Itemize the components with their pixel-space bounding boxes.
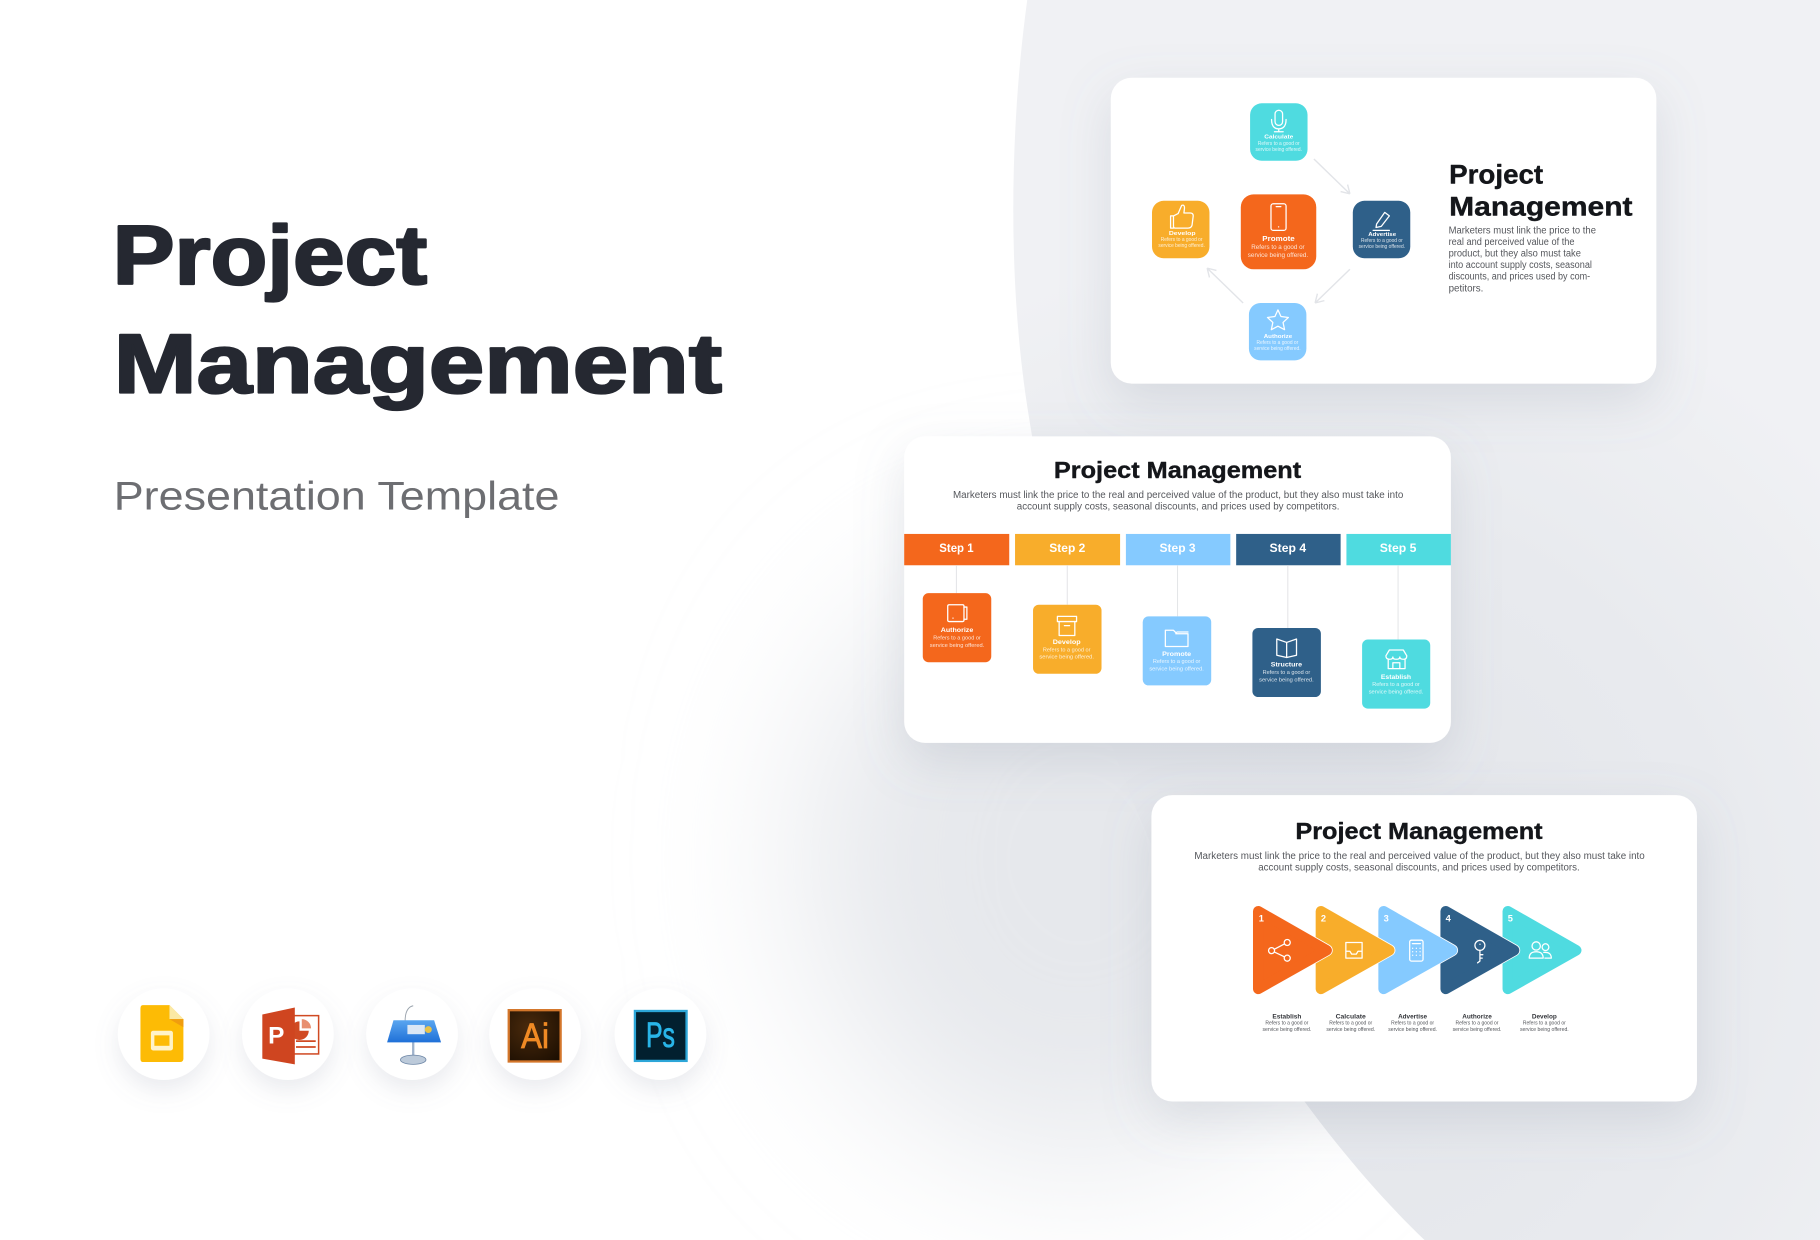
label: Establish xyxy=(1263,1013,1312,1033)
box: Advertise xyxy=(1353,201,1410,258)
step 3: Step 3 xyxy=(1160,541,1196,555)
main title xyxy=(113,208,722,411)
box: Calculate: Refers to a good or xyxy=(1258,141,1300,147)
box: Promote: service being offered. xyxy=(1248,252,1308,259)
label: Establish: service being offered. xyxy=(1263,1027,1312,1033)
step 1: Step 1 xyxy=(939,541,974,555)
box: Develop xyxy=(1152,201,1209,258)
icon: Keynote xyxy=(366,988,458,1080)
icon: Google Slides xyxy=(118,988,210,1080)
step 5: Establish xyxy=(1381,674,1411,681)
step 1 xyxy=(904,534,1009,662)
label: Advertise xyxy=(1388,1013,1437,1033)
label: Authorize: Refers to a good or xyxy=(1456,1021,1499,1027)
triangle 2: 2 xyxy=(1321,914,1326,924)
box: Advertise: Refers to a good or xyxy=(1361,238,1403,244)
box: Develop: Refers to a good or xyxy=(1161,237,1203,243)
subtitle: Presentation Template xyxy=(114,475,559,519)
arrows: cycle xyxy=(1207,159,1350,303)
label: Advertise: service being offered. xyxy=(1388,1027,1437,1033)
label: Calculate: Calculate xyxy=(1336,1013,1366,1020)
step 3: service being offered. xyxy=(1149,667,1204,673)
body text: discounts, and prices used by com- xyxy=(1449,272,1590,283)
box: Develop: Develop xyxy=(1169,231,1196,237)
label: Calculate: service being offered. xyxy=(1326,1027,1376,1033)
body text: product, but they also must take xyxy=(1449,249,1581,260)
body text: petitors. xyxy=(1449,283,1483,294)
step 3: Refers to a good or xyxy=(1153,659,1201,665)
triangle 1 xyxy=(1258,911,1327,989)
box: Authorize xyxy=(1249,303,1306,360)
label: Authorize xyxy=(1453,1013,1502,1033)
body text: account supply costs, seasonal discounts, and prices used by competitors. xyxy=(1017,502,1339,513)
step 5: Refers to a good or xyxy=(1372,682,1420,688)
step 4: Structure xyxy=(1271,662,1302,669)
box: Advertise: Advertise xyxy=(1368,232,1397,238)
box: Authorize: Refers to a good or xyxy=(1256,340,1299,346)
main title: Project xyxy=(113,208,427,302)
icon: PowerPoint xyxy=(242,988,334,1080)
step 2 xyxy=(1015,534,1120,674)
icon: PowerPoint: P xyxy=(268,1022,284,1049)
body text: account supply costs, seasonal discounts, and prices used by competitors. xyxy=(1258,863,1580,874)
icon: Adobe Photoshop: Ps xyxy=(646,1016,675,1055)
step 1: Refers to a good or xyxy=(933,636,981,642)
step 4 xyxy=(1236,534,1341,697)
icon: Adobe Photoshop xyxy=(615,988,706,1080)
step 4: Step 4 xyxy=(1270,541,1306,555)
panel: triangle process slide xyxy=(1151,795,1697,1102)
triangle 5 xyxy=(1508,911,1576,989)
body text xyxy=(1194,851,1645,874)
heading: Project xyxy=(1449,159,1543,189)
triangle 5: 5 xyxy=(1508,914,1513,924)
box: Advertise: service being offered. xyxy=(1359,244,1405,250)
label: Develop xyxy=(1520,1013,1569,1033)
triangle 4 xyxy=(1446,911,1514,989)
box: Calculate xyxy=(1250,103,1308,161)
heading: Project Management xyxy=(1295,818,1543,844)
box: Authorize: Authorize xyxy=(1264,334,1293,340)
label: Authorize: Authorize xyxy=(1462,1013,1492,1020)
label: Calculate: Refers to a good or xyxy=(1329,1021,1372,1027)
label: Establish: Refers to a good or xyxy=(1265,1021,1309,1027)
label: Develop: Develop xyxy=(1532,1013,1557,1020)
label: Advertise: Refers to a good or xyxy=(1391,1021,1434,1027)
step 2: service being offered. xyxy=(1039,655,1094,661)
icon: Adobe Illustrator: Ai xyxy=(521,1017,549,1056)
panel: cycle diagram slide xyxy=(1111,78,1656,384)
box: Develop: service being offered. xyxy=(1158,243,1205,249)
panel: step timeline slide xyxy=(904,436,1451,743)
step 4: service being offered. xyxy=(1259,677,1314,683)
box: Promote xyxy=(1241,194,1316,269)
body text: Marketers must link the price to the real and perceived value of the product, but they also must take into xyxy=(953,490,1404,501)
step 5: Step 5 xyxy=(1380,541,1417,555)
triangle 2 xyxy=(1321,911,1389,989)
label: Develop: Refers to a good or xyxy=(1523,1021,1566,1027)
label: Calculate xyxy=(1326,1013,1376,1033)
triangle 1: 1 xyxy=(1259,914,1264,924)
triangle 3: 3 xyxy=(1384,914,1389,924)
heading: Project Management xyxy=(1054,457,1301,483)
box: Promote: Refers to a good or xyxy=(1251,244,1305,251)
step 1: service being offered. xyxy=(930,643,985,649)
heading xyxy=(1449,159,1633,221)
box: Authorize: service being offered. xyxy=(1254,346,1301,352)
body text: Marketers must link the price to the real and perceived value of the product, but they also must take into xyxy=(1194,851,1645,862)
step 4: Refers to a good or xyxy=(1263,670,1310,676)
step 2: Develop xyxy=(1053,639,1081,646)
body text: Marketers must link the price to the xyxy=(1449,225,1596,236)
step 2: Refers to a good or xyxy=(1043,647,1091,653)
box: Promote: Promote xyxy=(1262,234,1295,243)
body text: real and perceived value of the xyxy=(1449,237,1575,248)
triangle 3 xyxy=(1384,911,1452,989)
icon: Adobe Illustrator xyxy=(489,988,581,1080)
main title: Management xyxy=(114,317,722,411)
triangle 4: 4 xyxy=(1446,914,1452,924)
software icons row xyxy=(118,988,706,1080)
step 5 xyxy=(1346,534,1451,709)
body text: into account supply costs, seasonal xyxy=(1449,260,1592,271)
step 2: Step 2 xyxy=(1049,541,1085,555)
label: Advertise: Advertise xyxy=(1398,1013,1428,1020)
body text xyxy=(1449,225,1596,294)
step 5: service being offered. xyxy=(1369,689,1424,695)
label: Authorize: service being offered. xyxy=(1453,1027,1502,1033)
step 3 xyxy=(1126,534,1230,685)
body text xyxy=(953,490,1404,513)
box: Calculate: service being offered. xyxy=(1256,147,1302,153)
label: Establish: Establish xyxy=(1272,1013,1302,1020)
label: Develop: service being offered. xyxy=(1520,1027,1569,1033)
step 3: Promote xyxy=(1162,651,1191,658)
heading: Management xyxy=(1449,191,1633,221)
step 1: Authorize xyxy=(941,627,974,634)
box: Calculate: Calculate xyxy=(1264,135,1294,141)
